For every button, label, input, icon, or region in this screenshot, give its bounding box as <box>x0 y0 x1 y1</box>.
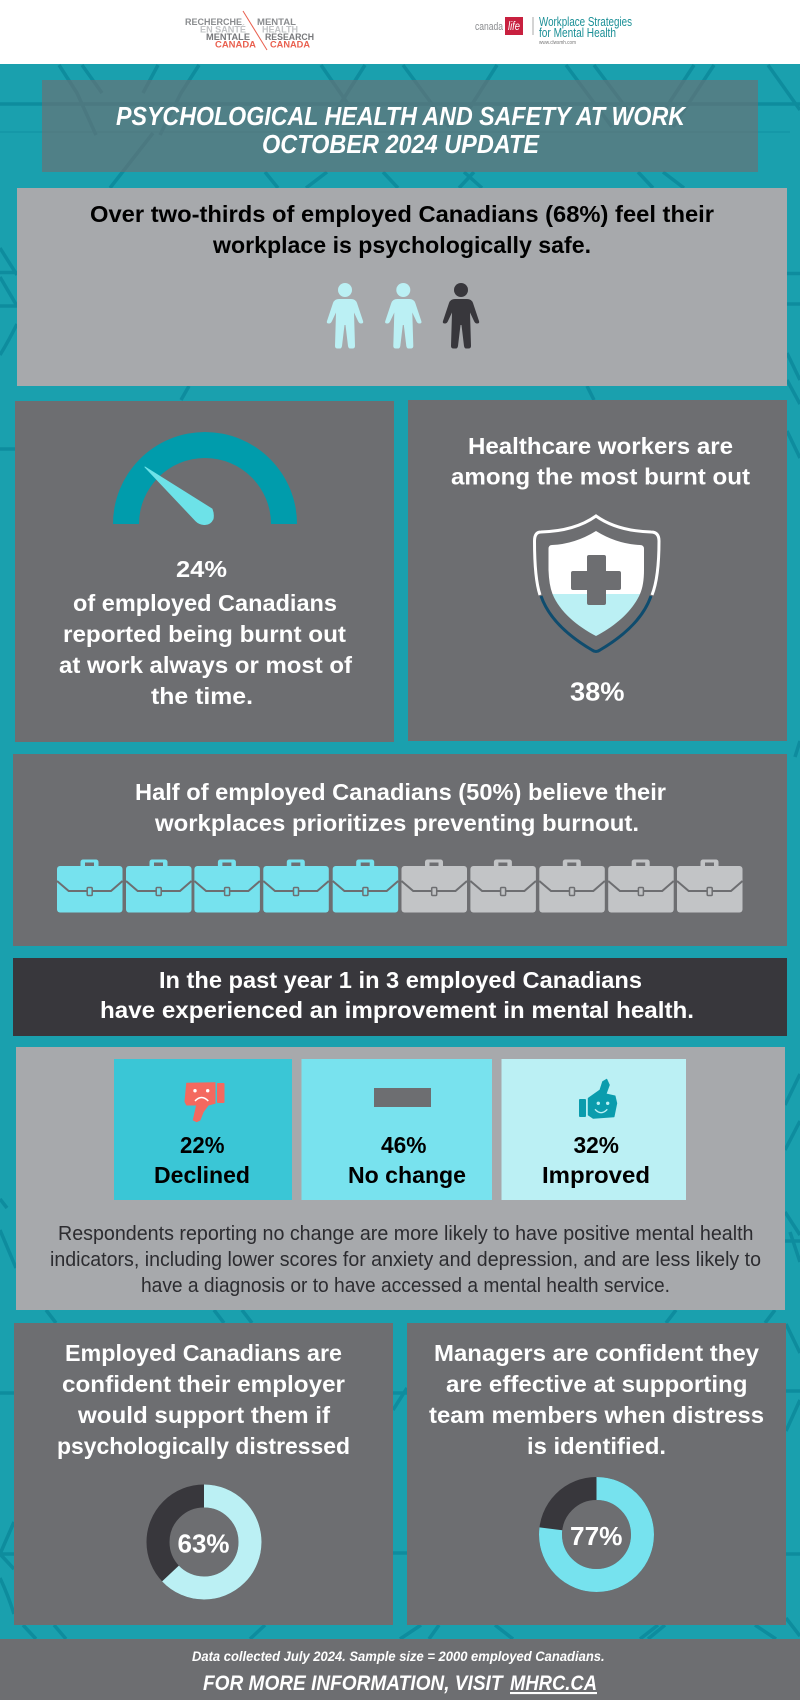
footer: MHRC.CA <box>510 1672 597 1695</box>
heading: manager confidence: Managers are confident they <box>434 1340 759 1366</box>
text: 24% burnt out: 24% <box>176 556 227 582</box>
heading: employer support: psychologically distressed <box>57 1433 350 1459</box>
text: 24% burnt out: reported being burnt out <box>63 621 346 647</box>
footer <box>0 1639 800 1700</box>
card: no change: No change <box>348 1162 466 1188</box>
panel: psychologically safe <box>17 188 787 386</box>
card: declined: Declined <box>154 1162 250 1188</box>
card: declined <box>114 1059 292 1200</box>
heading: manager confidence: is identified. <box>527 1433 666 1459</box>
logo: Mental Health Research Canada: EN SANTÉ <box>200 24 246 36</box>
heading: manager confidence <box>429 1340 764 1459</box>
text: 24% burnt out: the time. <box>151 683 253 709</box>
icon: thumbs down <box>185 1083 224 1122</box>
heading: 68% feel safe: workplace is psychologically safe. <box>212 232 591 258</box>
card: declined: 22% <box>180 1132 224 1158</box>
logo: Canada Life Workplace Strategies: www.clwsmh.com <box>539 40 576 46</box>
heading: employer support: confident their employer <box>62 1371 345 1397</box>
panel: preventing burnout <box>13 754 787 946</box>
logo: Canada Life Workplace Strategies: canada <box>475 21 504 33</box>
logo: Mental Health Research Canada <box>185 11 314 50</box>
stat: 38%: 38% <box>570 677 624 707</box>
title banner: PSYCHOLOGICAL HEALTH AND SAFETY AT WORK <box>116 101 687 131</box>
title banner <box>42 80 758 172</box>
logo: Canada Life Workplace Strategies: life <box>508 19 520 33</box>
card: improved: Improved <box>542 1162 650 1188</box>
heading: healthcare workers: Healthcare workers are <box>468 433 733 459</box>
banner: 1 in 3 improved: have experienced an improvement in mental health. <box>100 997 694 1023</box>
panel: employer support <box>14 1323 393 1625</box>
card: improved <box>502 1059 686 1200</box>
text: no change explanation: Respondents reporting no change are more likely to have positive mental health <box>58 1223 754 1245</box>
icon: thumbs up <box>579 1079 617 1118</box>
logo: Canada Life Workplace Strategies <box>475 14 632 46</box>
heading: employer support: would support them if <box>77 1402 330 1428</box>
heading: half prioritize prevention: Half of employed Canadians (50%) believe their <box>135 779 666 805</box>
donut chart: 77%: 77% <box>570 1521 622 1551</box>
heading: healthcare workers <box>451 433 750 490</box>
icon: medical shield <box>534 516 659 652</box>
text: 24% burnt out <box>59 556 352 709</box>
logo: Canada Life Workplace Strategies: for Mental Health <box>539 25 616 40</box>
icon row: ten briefcases <box>57 860 742 912</box>
logo: Mental Health Research Canada: MENTAL <box>257 17 296 28</box>
heading: half prioritize prevention <box>135 779 666 836</box>
text: no change explanation: indicators, including lower scores for anxiety and depression, and are less likely to <box>50 1249 761 1271</box>
panel: manager confidence <box>407 1323 786 1625</box>
banner: 1 in 3 improved: In the past year 1 in 3 employed Canadians <box>159 967 642 993</box>
text: 24% burnt out: at work always or most of <box>59 652 352 678</box>
header logo bar <box>0 0 800 64</box>
title banner: OCTOBER 2024 UPDATE <box>262 129 540 159</box>
logo: Mental Health Research Canada: MENTALE <box>206 32 250 43</box>
footer: FOR MORE INFORMATION, VISIT <box>203 1672 504 1695</box>
heading: 68% feel safe: Over two-thirds of employed Canadians (68%) feel their <box>90 201 714 227</box>
text: 24% burnt out: of employed Canadians <box>73 590 337 616</box>
donut chart: 63% <box>158 1496 250 1588</box>
icon: gauge <box>113 432 297 525</box>
logo: Mental Health Research Canada: CANADA <box>215 40 256 50</box>
icon: three people <box>327 283 479 348</box>
icon: dash <box>374 1088 431 1107</box>
donut chart: 77% <box>550 1488 642 1580</box>
heading: 68% feel safe <box>90 201 714 258</box>
heading: manager confidence: team members when distress <box>429 1402 764 1428</box>
logo: Canada Life Workplace Strategies: Workplace Strategies <box>539 14 632 29</box>
logo: Mental Health Research Canada: RESEARCH <box>265 32 314 43</box>
text: no change explanation <box>50 1223 761 1297</box>
panel: burnout gauge <box>15 401 394 742</box>
logo: Mental Health Research Canada: HEALTH <box>262 24 298 36</box>
heading: employer support <box>57 1340 350 1459</box>
card: no change <box>302 1059 492 1200</box>
panel: healthcare workers <box>408 400 787 741</box>
card: no change: 46% <box>381 1132 426 1158</box>
logo: Mental Health Research Canada: CANADA <box>270 40 310 50</box>
text: no change explanation: have a diagnosis or to have accessed a mental health service. <box>141 1275 670 1297</box>
heading: manager confidence: are effective at supporting <box>446 1371 748 1397</box>
footer: Data collected July 2024. Sample size = 2000 employed Canadians. <box>192 1648 605 1664</box>
heading: healthcare workers: among the most burnt out <box>451 464 750 490</box>
donut chart: 63%: 63% <box>178 1529 230 1559</box>
heading: half prioritize prevention: workplaces prioritizes preventing burnout. <box>154 810 639 836</box>
banner: 1 in 3 improved <box>13 958 787 1036</box>
heading: employer support: Employed Canadians are <box>65 1340 342 1366</box>
card: improved: 32% <box>574 1132 619 1158</box>
logo: Mental Health Research Canada: RECHERCHE <box>185 17 242 28</box>
panel: mental health change <box>16 1047 785 1310</box>
